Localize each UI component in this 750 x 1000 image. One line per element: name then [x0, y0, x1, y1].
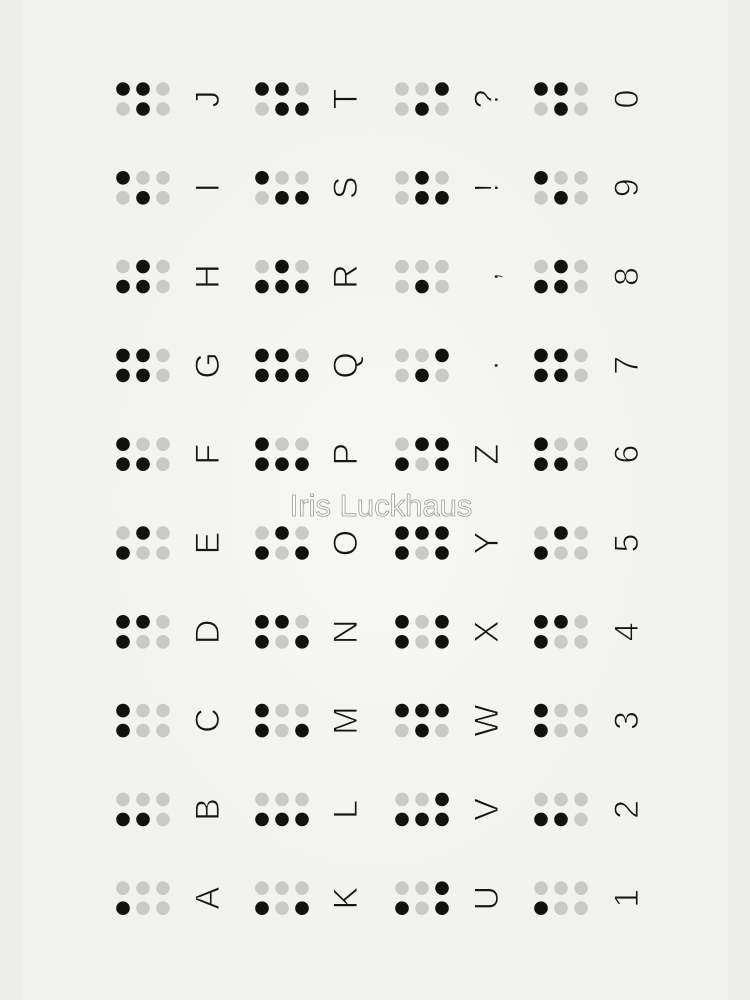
row: I S ! 9: I — [189, 183, 227, 193]
row: J T ? 0: 0 — [608, 90, 646, 108]
row: G Q . 7: 7 — [608, 356, 646, 375]
row: F P Z 6: P — [327, 443, 365, 466]
row: A K U 1: U — [468, 886, 506, 910]
row: I S ! 9: 9 — [608, 178, 646, 197]
row: G Q . 7: . — [468, 361, 506, 370]
row: D N X 4: 4 — [608, 622, 646, 641]
row: B L V 2: L — [327, 800, 365, 819]
row: G Q . 7 — [116, 349, 646, 382]
row: D N X 4 — [116, 615, 646, 649]
row: I S ! 9 — [116, 171, 646, 205]
row: J T ? 0 — [116, 82, 646, 116]
row: H R , 8 — [116, 260, 646, 293]
row: E O Y 5: 5 — [608, 534, 646, 552]
row: A K U 1: K — [327, 887, 365, 910]
row: G Q . 7: G — [189, 352, 227, 379]
row: F P Z 6: 6 — [608, 445, 646, 464]
row: B L V 2 — [116, 793, 646, 826]
row: B L V 2: 2 — [608, 800, 646, 819]
row: C M W 3: W — [468, 705, 506, 737]
row: I S ! 9: S — [327, 176, 365, 199]
row: J T ? 0: J — [189, 90, 227, 108]
row: C M W 3: C — [189, 708, 227, 733]
row: J T ? 0: T — [327, 89, 365, 109]
watermark: Iris Luckhaus — [290, 488, 472, 523]
row: E O Y 5 — [116, 526, 646, 560]
row: F P Z 6: Z — [468, 444, 506, 465]
row: C M W 3: M — [327, 706, 365, 735]
row: J T ? 0: ? — [468, 90, 506, 108]
row: B L V 2: V — [468, 798, 506, 821]
row: A K U 1: 1 — [608, 889, 646, 908]
row: H R , 8: 8 — [608, 267, 646, 286]
row: E O Y 5: E — [189, 532, 227, 554]
row: E O Y 5: O — [327, 530, 365, 556]
row: D N X 4: X — [468, 620, 506, 643]
row: E O Y 5: Y — [468, 532, 506, 554]
row: C M W 3 — [116, 704, 646, 737]
row: H R , 8: R — [327, 264, 365, 289]
row: F P Z 6 — [116, 437, 646, 471]
row: H R , 8: H — [189, 264, 227, 289]
row: A K U 1: A — [189, 887, 227, 910]
row: D N X 4: N — [327, 620, 365, 644]
row: I S ! 9: ! — [468, 183, 506, 193]
row: A K U 1 — [116, 881, 646, 915]
row: D N X 4: D — [189, 620, 227, 644]
row: G Q . 7: Q — [327, 352, 365, 379]
braille chart — [116, 82, 646, 915]
row: B L V 2: B — [189, 798, 227, 821]
row: H R , 8: , — [468, 272, 506, 281]
row: C M W 3: 3 — [608, 711, 646, 730]
row: F P Z 6: F — [189, 444, 227, 465]
